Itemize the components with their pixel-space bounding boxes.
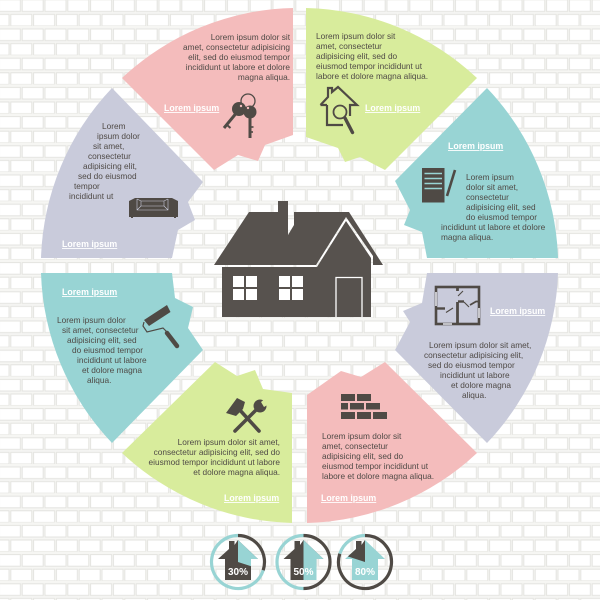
panel: paint roller (left lower teal)	[41, 273, 203, 443]
windows	[233, 276, 303, 300]
text: floor plan description: sed do eiusmod tempor	[428, 360, 515, 370]
text: bricks description: amet, consectetur	[322, 441, 388, 451]
progress icon: 30%: 30%	[228, 567, 248, 578]
text: floor plan description: consectetur adipisicing elit,	[424, 350, 523, 360]
heading: keys: Lorem ipsum	[164, 103, 219, 113]
heading: search: Lorem ipsum	[365, 103, 420, 113]
text: sofa description: adipisicing elit,	[83, 161, 137, 171]
progress icon: 50%	[277, 536, 330, 588]
heading: roller: Lorem ipsum	[62, 287, 117, 297]
text: roller description: aliqua.	[87, 375, 111, 385]
text: roller description: incididunt ut labore	[77, 355, 147, 365]
progress icon: 30%	[212, 536, 265, 588]
text: floor plan description: et dolore magna	[451, 380, 511, 390]
heading: tools: Lorem ipsum	[224, 493, 279, 503]
text: sofa description: sed do eiusmod	[78, 171, 137, 181]
icon: floor plan	[436, 286, 480, 325]
text: search description: amet, consectetur	[316, 41, 382, 51]
text: bricks description: labore et dolore magna aliqua.	[322, 471, 434, 481]
text: roller description: et dolore magna	[82, 365, 142, 375]
text: keys description: amet, consectetur adipisicing	[183, 42, 290, 52]
panel: tools (bottom left green)	[122, 362, 292, 523]
heading: bricks: Lorem ipsum	[321, 493, 376, 503]
icon: house with magnifier	[320, 87, 357, 132]
text: tools description: et dolore magna aliqua.	[193, 467, 280, 477]
text: document description: incididunt ut labore et dolore	[441, 222, 546, 232]
heading: sofa: Lorem ipsum	[62, 239, 117, 249]
text: floor plan description: incididunt ut labore	[440, 370, 510, 380]
text: roller description: do eiusmod tempor	[72, 345, 143, 355]
text: tools description: consectetur adipisicing elit, sed do	[154, 447, 280, 457]
icon: document and pen	[422, 168, 455, 202]
icon: bricks	[341, 394, 387, 419]
text: keys description: magna aliqua.	[238, 72, 290, 82]
text: tools description: eiusmod tempor incididunt ut labore	[149, 457, 280, 467]
text: keys description: Lorem ipsum dolor sit	[211, 32, 291, 42]
text: document description: Lorem ipsum	[466, 172, 514, 182]
panel: document (right upper teal)	[395, 88, 558, 258]
text: search description: adipisicing elit, sed do	[316, 51, 398, 61]
text: sofa description: ipsum dolor	[97, 131, 140, 141]
text: floor plan description: aliqua.	[462, 390, 486, 400]
progress icon: 80%	[338, 536, 391, 588]
text: tools description: Lorem ipsum dolor sit amet,	[178, 437, 280, 447]
text: document description: magna aliqua.	[441, 232, 493, 242]
text: roller description: adipisicing elit, sed	[67, 335, 137, 345]
text: sofa description: incididunt ut	[69, 191, 114, 201]
panel: sofa (left upper lavender)	[41, 88, 203, 258]
heading: document: Lorem ipsum	[448, 141, 503, 151]
text: keys description: elit, sed do eiusmod tempor	[188, 52, 290, 62]
text: search description: labore et dolore magna aliqua.	[316, 71, 428, 81]
text: roller description: Lorem ipsum dolor	[57, 315, 126, 325]
text: document description: consectetur	[466, 192, 509, 202]
text: document description: dolor sit amet,	[466, 182, 518, 192]
heading: floor plan: Lorem ipsum	[490, 306, 545, 316]
panel: search house (top right green)	[306, 8, 477, 170]
text: sofa description: consectetur	[88, 151, 131, 161]
central house illustration	[214, 201, 383, 317]
text: keys description: incididunt ut labore et dolore	[186, 62, 290, 72]
text: document description: do eiusmod tempor	[466, 212, 537, 222]
text: roller description: sit amet, consectetur	[62, 325, 139, 335]
progress icon: 50%: 50%	[293, 567, 314, 578]
door	[336, 278, 362, 317]
icon: paint roller	[143, 305, 177, 346]
panel: floor plan (right lower lavender)	[395, 273, 558, 443]
text: bricks description: eiusmod tempor incididunt ut	[322, 461, 429, 471]
icon: hammer and wrench	[226, 398, 269, 431]
icon: keys	[224, 94, 256, 138]
text: bricks description: adipisicing elit, sed do	[322, 451, 404, 461]
text: sofa description: sit amet,	[93, 141, 124, 151]
text: sofa description: Lorem	[102, 121, 126, 131]
icon: sofa	[129, 198, 178, 218]
panel: bricks (bottom right pink)	[307, 362, 477, 523]
text: document description: adipisicing elit, sed	[466, 202, 536, 212]
text: sofa description: tempor	[74, 181, 100, 191]
progress icon: 80%: 80%	[355, 567, 375, 578]
text: floor plan description: Lorem ipsum dolor sit amet,	[429, 340, 531, 350]
text: bricks description: Lorem ipsum dolor sit	[322, 431, 402, 441]
text: search description: Lorem ipsum dolor sit	[316, 31, 396, 41]
panel: keys (top left pink)	[122, 8, 293, 170]
text: search description: eiusmod tempor incididunt ut	[316, 61, 423, 71]
